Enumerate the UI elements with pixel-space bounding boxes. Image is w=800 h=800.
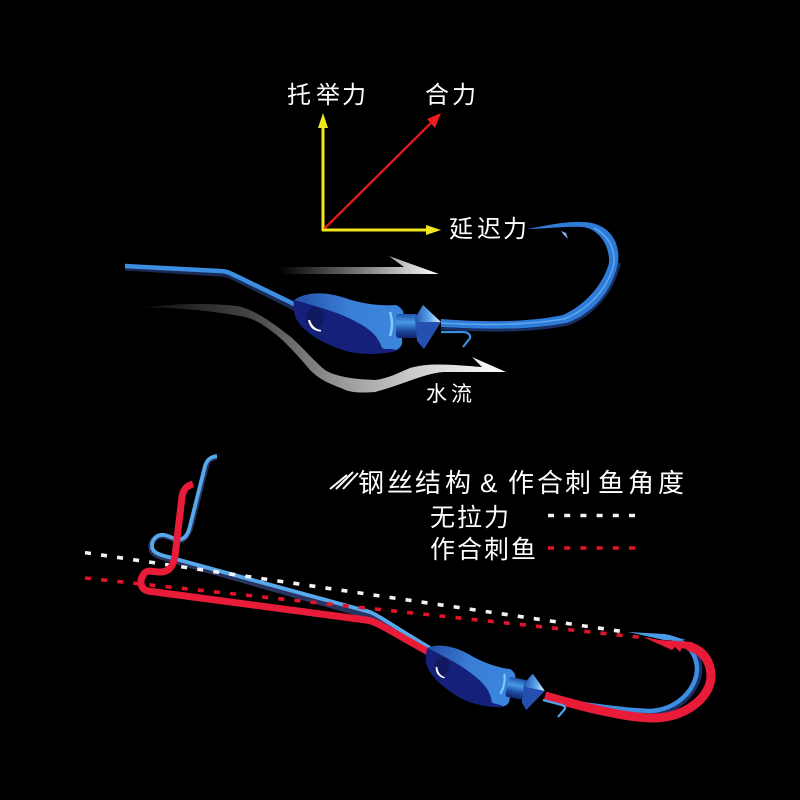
hook, top: [441, 222, 620, 330]
lower blue hook: [545, 632, 700, 714]
legend: [430, 504, 637, 564]
arrow: gradient motion: [279, 256, 439, 274]
arrow: resultant force: [323, 113, 441, 230]
dashed line: no tension: [85, 553, 624, 632]
dashed line: hook set: [85, 578, 642, 638]
red dash sample: [548, 546, 637, 550]
lure body, lower: [418, 642, 550, 717]
small hook eye, top: [441, 332, 470, 347]
arrow: water flow: [140, 304, 506, 393]
force diagram: [287, 82, 527, 243]
arrow: lift force: [318, 113, 328, 231]
lure body, top: [294, 293, 441, 354]
label: no tension: 无拉力: [430, 504, 509, 532]
arrow: forward force: [322, 225, 441, 235]
lower red hook: [545, 637, 711, 718]
section heading: [330, 468, 684, 498]
small hook eye, lower: [543, 700, 565, 717]
lower blue wire: [151, 456, 430, 652]
label: resultant force: 合力: [425, 82, 476, 109]
label: water flow: 水流: [426, 383, 472, 406]
icon: slashes: [330, 472, 358, 489]
top wire: [125, 266, 296, 309]
label: hook set: 作合刺鱼: [430, 536, 536, 564]
lower red wire: [141, 484, 432, 654]
label: lift force: 托举力: [287, 82, 366, 109]
label: forward force: 延迟力: [449, 216, 527, 243]
white dash sample: [548, 514, 637, 517]
title: 钢丝结构&作合刺鱼角度: [358, 468, 684, 498]
